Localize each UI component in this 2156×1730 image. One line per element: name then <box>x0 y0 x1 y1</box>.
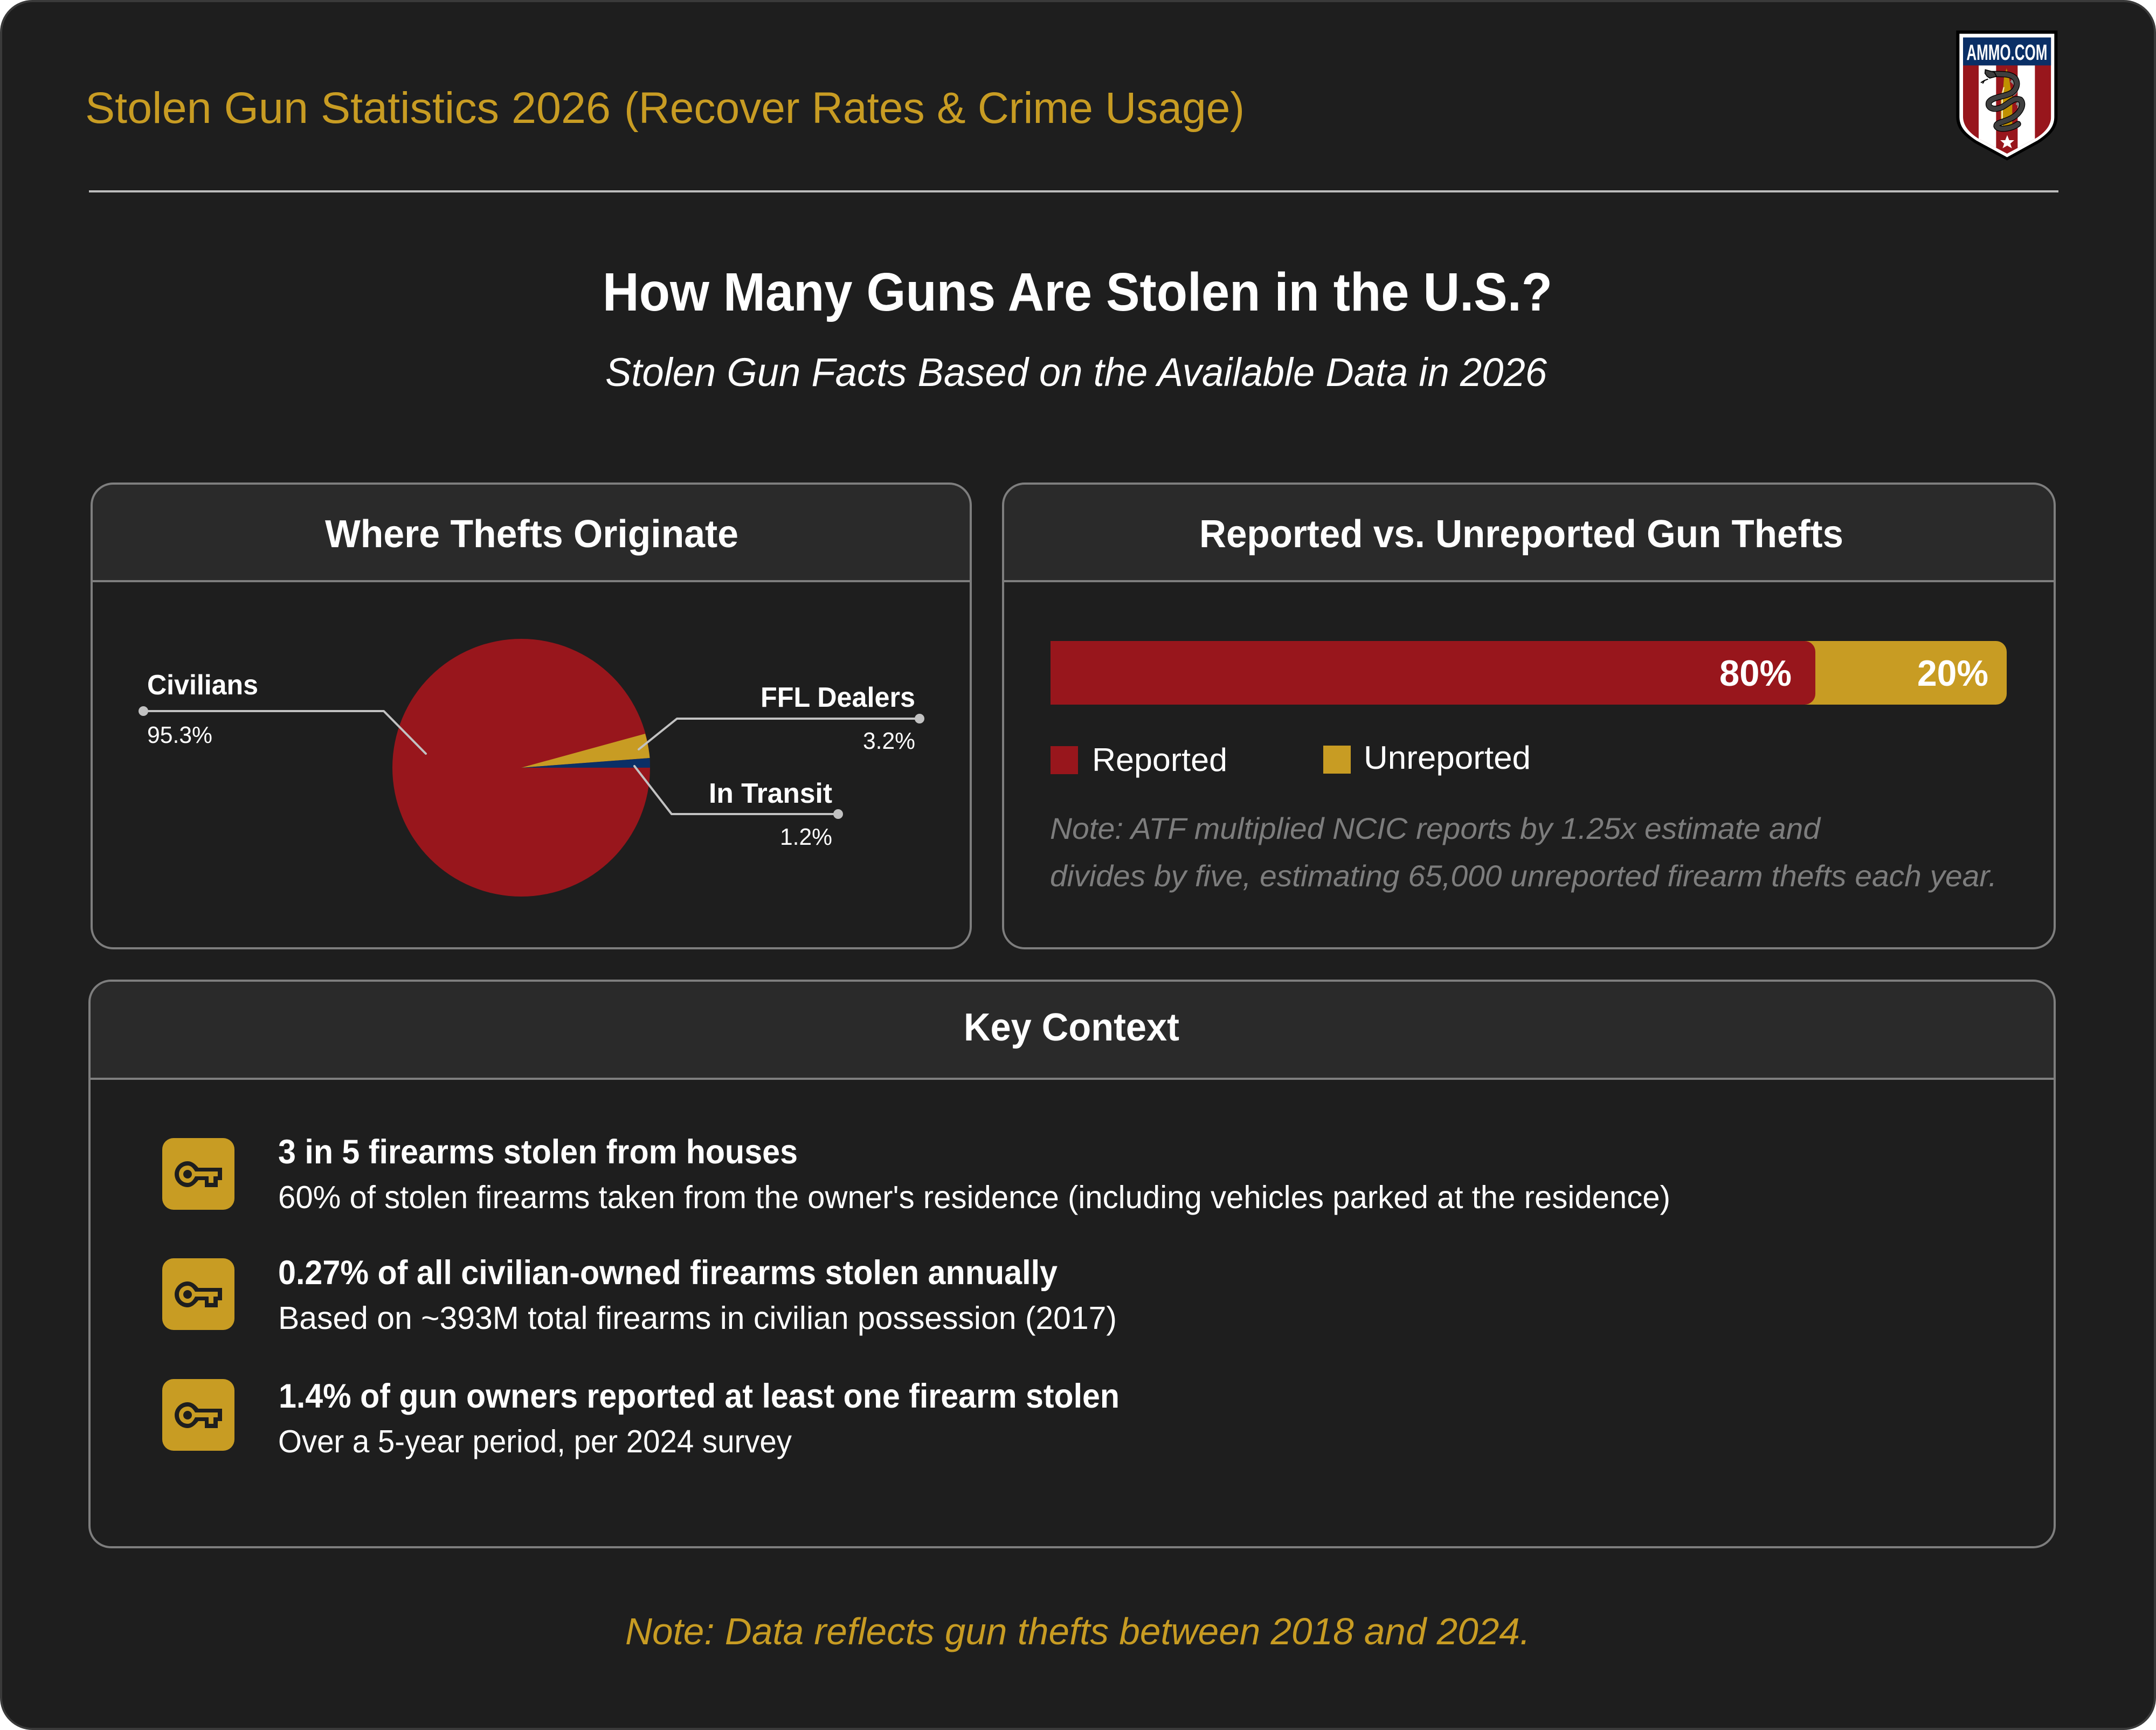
icon: key 2 <box>162 1258 234 1330</box>
stacked bar chart: 20% <box>1917 653 1988 694</box>
callout: civilians: 95.3% <box>147 722 212 748</box>
callout: in transit: 1.2% <box>780 824 832 850</box>
icon: key 3 <box>162 1379 234 1451</box>
logo: AMMO.COM shield <box>1956 31 2057 161</box>
key fact 2 <box>278 1254 1117 1336</box>
key fact 3: 1.4% of gun owners reported at least one firearm stolen <box>279 1377 1120 1415</box>
callout: civilians <box>139 670 426 754</box>
callout: in transit <box>634 766 843 850</box>
note text: divides by five, estimating 65,000 unreported firearm thefts each year. <box>1050 859 1997 893</box>
title <box>85 84 1245 133</box>
callout: FFL dealers: 3.2% <box>863 728 915 754</box>
stacked bar chart <box>1051 641 2007 705</box>
key fact 3: Over a 5-year period, per 2024 survey <box>278 1424 792 1459</box>
callout: FFL dealers: FFL Dealers <box>761 682 915 713</box>
icon: key 1 <box>162 1138 234 1210</box>
key fact 2: Based on ~393M total firearms in civilian possession (2017) <box>278 1300 1117 1336</box>
panel: where thefts originate <box>92 484 971 948</box>
panel heading: reported vs unreported: Reported vs. Unreported Gun Thefts <box>1199 513 1843 556</box>
panel heading: key context: Key Context <box>964 1006 1179 1049</box>
legend: reported: Reported <box>1092 742 1227 778</box>
legend: unreported: Unreported <box>1364 740 1531 776</box>
key fact 2: 0.27% of all civilian-owned firearms stolen annually <box>278 1254 1058 1292</box>
key fact 1 <box>278 1133 1670 1215</box>
panel heading: where thefts originate: Where Thefts Originate <box>325 513 738 556</box>
pie chart <box>392 639 650 897</box>
footer note: Note: Data reflects gun thefts between 2018 and 2024. <box>625 1610 1530 1652</box>
header divider line <box>89 190 2058 192</box>
main heading: How Many Guns Are Stolen in the U.S.? <box>603 262 1552 322</box>
key fact 1: 3 in 5 firearms stolen from houses <box>278 1133 798 1171</box>
title: Stolen Gun Statistics 2026 <box>85 84 611 133</box>
callout: civilians: Civilians <box>147 670 258 701</box>
subtitle: Stolen Gun Facts Based on the Available Data in 2026 <box>605 350 1547 395</box>
panel: key context <box>89 981 2055 1547</box>
key fact 3 <box>278 1377 1120 1459</box>
panel: reported vs unreported gun thefts <box>1003 484 2055 948</box>
note text <box>1050 811 1997 893</box>
note text: Note: ATF multiplied NCIC reports by 1.25x estimate and <box>1050 811 1821 845</box>
callout: FFL dealers <box>639 682 924 754</box>
logo: AMMO.COM shield: AMMO.COM <box>1966 40 2047 65</box>
stacked bar chart: 80% <box>1719 653 1792 694</box>
title: (Recover Rates & Crime Usage) <box>624 84 1245 133</box>
key fact 1: 60% of stolen firearms taken from the owner's residence (including vehicles parked at the residence) <box>278 1180 1670 1215</box>
callout: in transit: In Transit <box>709 778 832 809</box>
